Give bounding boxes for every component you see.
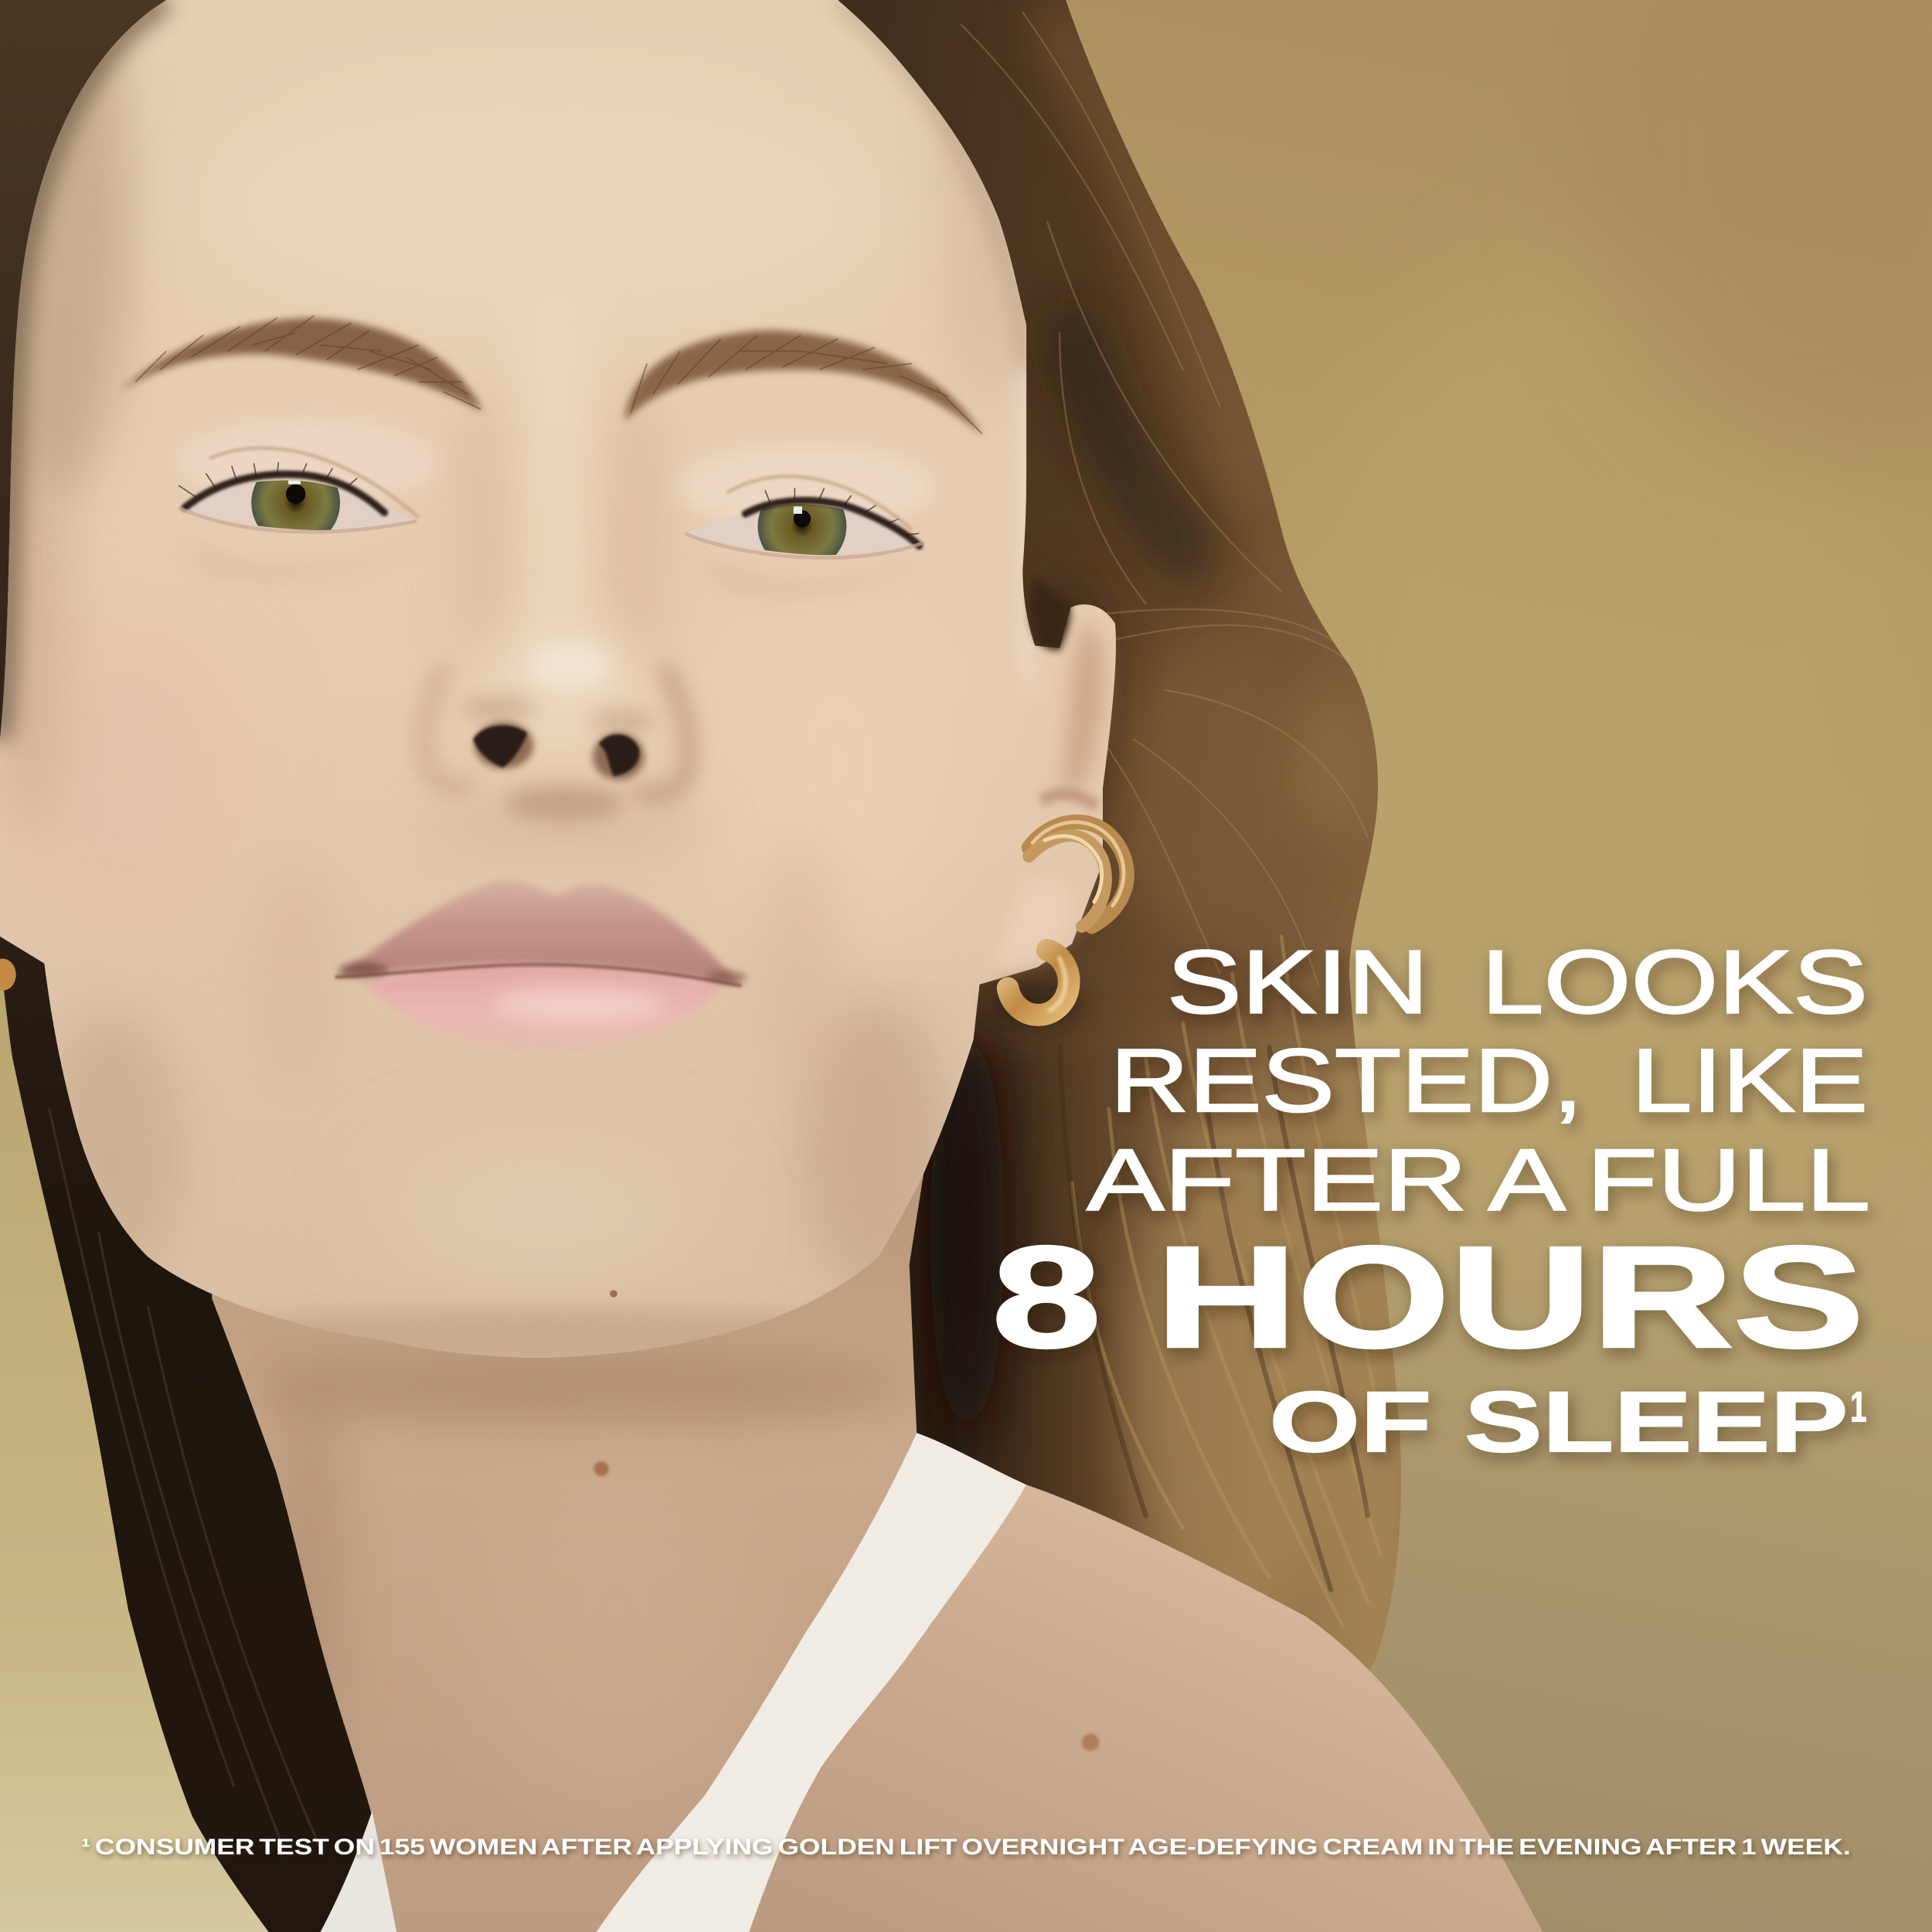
hair: left side (0, 0, 493, 1932)
neck shadow (247, 1349, 912, 1824)
headline line 4: 8 hours: 8 HOURS (992, 1216, 1864, 1378)
lashes: left (179, 462, 357, 498)
eyebrow: right (624, 330, 983, 436)
headline line 5: of sleep: ¹ (1849, 1373, 1868, 1470)
headline line 1: SKIN LOOKS (1167, 932, 1868, 1032)
headline line 3: AFTER A FULL (1087, 1131, 1870, 1229)
body: neck (212, 1171, 924, 1932)
garment: white halter strap (321, 1433, 1026, 1932)
nose: wing shading (423, 665, 471, 787)
lips (335, 881, 747, 1053)
headline line 2: RESTED, LIKE (1111, 1030, 1868, 1131)
lashes: right (765, 488, 919, 535)
nostrils (473, 722, 645, 780)
hair: back mass (0, 0, 1417, 1932)
footnote: ¹ CONSUMER TEST ON 155 WOMEN AFTER APPLYING GOLDEN LIFT OVERNIGHT AGE-DEFYING CREAM IN THE EVENING AFTER 1 WEEK. (81, 1835, 1851, 1860)
headline (992, 932, 1870, 1470)
nose (423, 284, 689, 821)
moles (594, 1290, 1099, 1751)
earring: left edge (0, 958, 16, 991)
hair: shading and strands (900, 12, 1417, 1713)
eye: right (678, 444, 937, 597)
headline line 5: of sleep: OF SLEEP (1269, 1373, 1849, 1470)
eye: left (178, 419, 436, 534)
hair: right side (838, 0, 1401, 1688)
earring: hoop (991, 950, 1084, 1026)
body: shoulder (740, 1485, 1543, 1932)
hair: left strands (49, 1109, 321, 1849)
lip: upper (335, 881, 742, 986)
ear: inner shadow (992, 579, 1104, 968)
face (0, 0, 1116, 1364)
earring: double ring (1029, 822, 1127, 927)
eyebrow: left (120, 315, 483, 412)
lip: lower (363, 964, 721, 1053)
face: shading (0, 0, 1035, 1364)
